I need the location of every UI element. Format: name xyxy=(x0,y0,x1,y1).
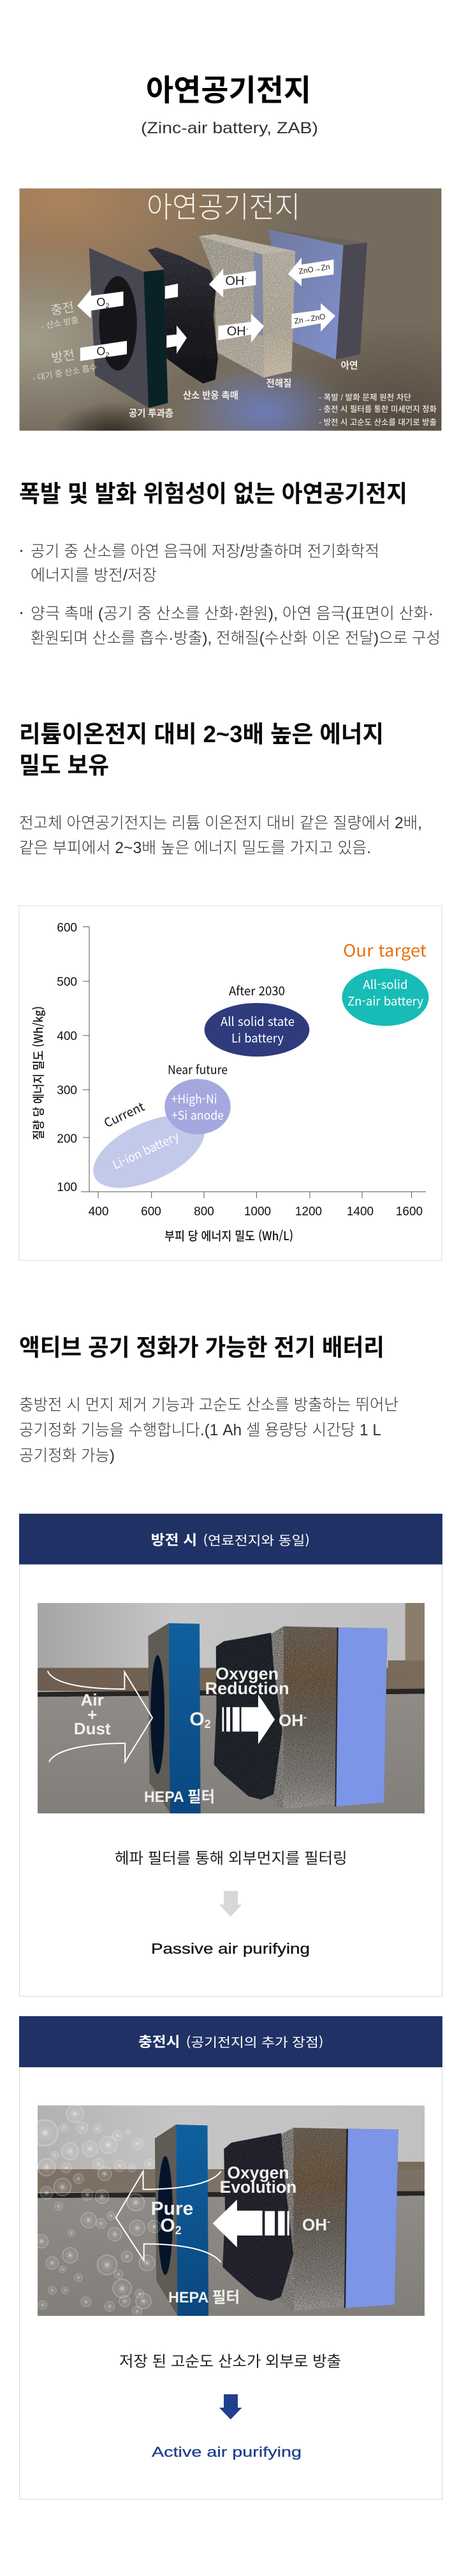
image labels: OH xyxy=(302,2215,327,2234)
text: energy density description xyxy=(19,814,422,857)
bubble: near future: +Si anode xyxy=(171,1106,224,1123)
reduction arrow xyxy=(222,1694,275,1745)
bubble: li-ion xyxy=(82,1097,215,1203)
electrolyte side xyxy=(270,1627,284,1809)
title: 아연공기전지 xyxy=(146,66,311,110)
x axis labels: 1400 xyxy=(347,1205,374,1218)
y axis labels xyxy=(57,921,77,1194)
reaction labels: - xyxy=(244,275,247,282)
bullet list: 에너지를 방전/저장 xyxy=(31,567,157,585)
label: charge: 충전 xyxy=(50,300,75,318)
reaction labels: Zn→ZnO xyxy=(294,312,326,326)
bullet list: 양극 촉매 (공기 중 산소를 산화·환원), 아연 음극(표면이 산화· xyxy=(31,604,433,622)
bubble: after 2030: All solid state xyxy=(221,1013,295,1030)
catalyst layer xyxy=(148,247,218,383)
image labels: - xyxy=(303,1712,307,1723)
image labels: Oxygen xyxy=(227,2163,289,2182)
panel header: (공기전지의 추가 장점) xyxy=(186,2032,324,2051)
catalyst xyxy=(222,2133,293,2301)
oxygen bubbles xyxy=(32,2105,161,2316)
electrolyte side xyxy=(279,2128,293,2311)
component labels: 공기 투과층 xyxy=(129,408,173,419)
benefit list xyxy=(319,393,437,427)
zinc xyxy=(344,2129,398,2308)
bullet list: 공기 중 산소를 아연 음극에 저장/방출하며 전기화학적 xyxy=(31,543,379,560)
bullet list xyxy=(20,543,441,647)
arrow: down grey xyxy=(219,1891,242,1917)
arrow bits xyxy=(77,258,335,361)
y axis labels: 100 xyxy=(57,1181,77,1194)
label: charge xyxy=(32,300,98,383)
image labels: Dust xyxy=(74,1719,111,1738)
hepa filter xyxy=(148,1623,201,1813)
image labels: Reduction xyxy=(205,1679,289,1698)
bubble: li-ion: Current xyxy=(101,1097,147,1131)
component labels: 아연 xyxy=(340,360,358,371)
axes xyxy=(81,927,426,1198)
bubble: after 2030 xyxy=(205,982,309,1057)
chart panel: energy density comparison xyxy=(19,905,442,1260)
label: charge: - 대기 중 산소 흡수 xyxy=(32,362,98,383)
panel: discharge xyxy=(19,1514,442,1996)
subtitle: (Zinc-air battery, ZAB) xyxy=(141,119,318,137)
bubble: our target: Our target xyxy=(343,938,426,962)
electrolyte xyxy=(284,1627,337,1809)
heading: no explosion risk: 폭발 및 발화 위험성이 없는 아연공기전지 xyxy=(19,474,407,509)
bubble: near future: Near future xyxy=(168,1061,228,1078)
x axis labels: 600 xyxy=(141,1205,161,1218)
reaction labels: ZnO→Zn xyxy=(298,262,330,276)
bubble: after 2030: After 2030 xyxy=(229,982,285,999)
y axis labels: 500 xyxy=(57,976,77,989)
component labels xyxy=(129,360,358,419)
panel: charge xyxy=(19,2016,442,2499)
bubble: our target xyxy=(342,938,428,1026)
y axis title: 질량 당 에너지 밀도 (Wh/kg) xyxy=(29,1006,47,1140)
x axis labels xyxy=(89,1205,423,1218)
image labels xyxy=(151,2163,330,2237)
panel header: 방전 시 xyxy=(151,1529,197,1549)
illustration: zinc-air battery exploded view xyxy=(19,184,441,430)
zinc plate xyxy=(268,229,367,360)
bubble: our target: Zn-air battery xyxy=(347,992,423,1009)
hepa filter xyxy=(155,2125,208,2316)
image labels: OH xyxy=(279,1711,303,1730)
image title: 아연공기전지 xyxy=(147,184,300,226)
reaction labels: 2 xyxy=(105,351,110,359)
reaction labels xyxy=(96,262,330,359)
electrolyte xyxy=(293,2128,347,2311)
image labels: 2 xyxy=(205,1718,211,1731)
air layer frame xyxy=(89,248,168,408)
x axis labels: 1000 xyxy=(244,1205,271,1218)
reaction labels: O xyxy=(96,345,105,358)
label: charge: 방전 xyxy=(50,348,76,366)
reaction labels: 2 xyxy=(105,302,110,310)
image labels: Air xyxy=(81,1690,104,1709)
bubble: after 2030: Li battery xyxy=(231,1029,284,1046)
image labels: + xyxy=(87,1705,97,1724)
text: purification description: 공기정화 기능을 수행합니다.(1 Ah 셀 용량당 시간당 1 L xyxy=(19,1421,381,1439)
y axis labels: 200 xyxy=(57,1132,77,1146)
bubble: near future xyxy=(164,1061,231,1134)
x axis labels: 1600 xyxy=(396,1205,423,1218)
label: charge: - 산소 방출 xyxy=(40,315,79,331)
reaction labels: OH xyxy=(227,325,246,339)
image labels: Pure xyxy=(151,2199,193,2219)
x axis labels: 800 xyxy=(194,1205,214,1218)
x axis labels: 1200 xyxy=(295,1205,322,1218)
illustration: charge cell xyxy=(32,2105,425,2316)
bullet list: 환원되며 산소를 흡수·방출), 전해질(수산화 이온 전달)으로 구성 xyxy=(31,629,441,647)
image label: hepa: HEPA 필터 xyxy=(144,1789,215,1806)
y axis labels: 300 xyxy=(57,1084,77,1097)
reaction labels: OH xyxy=(225,274,244,288)
benefit list: - 방전 시 고순도 산소를 대기로 방출 xyxy=(319,418,437,427)
text: energy density description: 전고체 아연공기전지는 리튬 이온전지 대비 같은 질량에서 2배, xyxy=(19,814,422,832)
evolution arrow xyxy=(213,2200,289,2248)
heading: energy density: 리튬이온전지 대비 2~3배 높은 에너지 xyxy=(19,721,384,747)
component labels: 전해질 xyxy=(266,378,292,389)
bubble: li-ion: Li-ion battery xyxy=(110,1127,182,1173)
benefit list: - 충전 시 필터를 통한 미세먼지 정화 xyxy=(319,405,437,414)
zinc xyxy=(335,1627,388,1806)
y axis labels: 400 xyxy=(57,1030,77,1043)
heading: active air purification: 액티브 공기 정화가 가능한 전기 배터리 xyxy=(19,1328,384,1363)
component labels: 산소 반응 촉매 xyxy=(183,390,238,401)
caption: 헤파 필터를 통해 외부먼지를 필터링 xyxy=(115,1845,347,1868)
panel header xyxy=(19,2016,442,2067)
image labels: O xyxy=(160,2215,175,2236)
image labels: O xyxy=(189,1709,205,1730)
image labels xyxy=(74,1664,307,1738)
caption: 저장 된 고순도 산소가 외부로 방출 xyxy=(119,2349,341,2371)
reaction labels: O xyxy=(96,296,105,309)
illustration: discharge cell xyxy=(38,1603,425,1813)
image labels: Evolution xyxy=(220,2177,296,2197)
result label: Passive air purifying xyxy=(151,1940,310,1957)
image labels: Oxygen xyxy=(215,1664,279,1683)
panel header: 충전시 xyxy=(138,2031,180,2051)
text: energy density description: 같은 부피에서 2~3배 높은 에너지 밀도를 가지고 있음. xyxy=(19,839,371,857)
electrolyte block xyxy=(199,234,295,377)
heading: energy density: 밀도 보유 xyxy=(19,752,109,779)
text: purification description: 충방전 시 먼지 제거 기능과 고순도 산소를 방출하는 뛰어난 xyxy=(19,1396,398,1414)
y axis labels: 600 xyxy=(57,921,77,935)
heading: energy density xyxy=(19,721,384,779)
arrow: down blue xyxy=(219,2394,242,2419)
oxygen outlet arrow xyxy=(116,2171,221,2262)
panel header xyxy=(19,1514,442,1565)
reaction labels: - xyxy=(246,326,248,333)
text: purification description: 공기정화 가능) xyxy=(19,1447,115,1465)
bubble: our target: All-solid xyxy=(363,976,408,993)
x axis title: 부피 당 에너지 밀도 (Wh/L) xyxy=(164,1227,293,1244)
panel header: (연료전지와 동일) xyxy=(203,1530,310,1549)
catalyst xyxy=(214,1633,282,1799)
image labels: 2 xyxy=(175,2224,182,2237)
result label: Active air purifying xyxy=(152,2444,302,2460)
image labels: - xyxy=(327,2216,330,2227)
text: purification description xyxy=(19,1396,398,1465)
image label: hepa: HEPA 필터 xyxy=(168,2289,240,2306)
benefit list: - 폭발 / 발화 문제 원천 차단 xyxy=(319,393,411,402)
x axis labels: 400 xyxy=(89,1205,108,1218)
bubble: near future: +High-Ni xyxy=(171,1090,217,1107)
air inlet arrow xyxy=(48,1671,152,1762)
